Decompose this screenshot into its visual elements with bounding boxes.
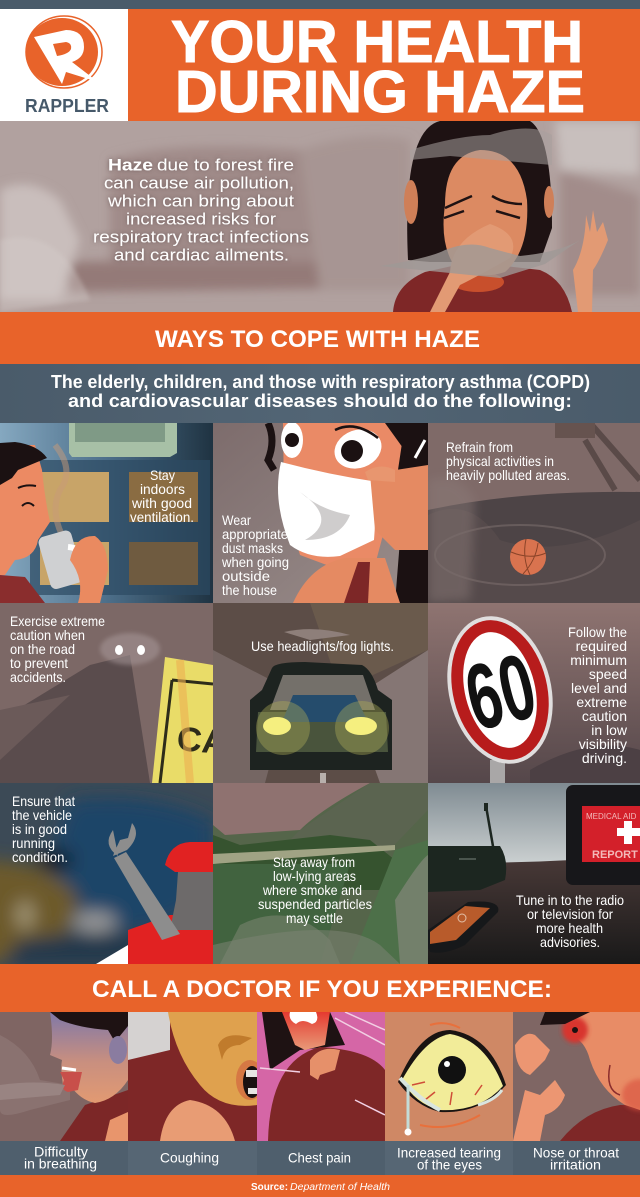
logo: Rappler: RAPPLER	[25, 96, 109, 116]
panel: wear dust masks: when going	[221, 554, 289, 570]
panel: refrain from physical activity: Refrain from	[446, 439, 513, 455]
panel: speed limit	[428, 603, 640, 783]
panel: use headlights: Use headlights/fog lights.	[251, 638, 394, 654]
panel: caution on the road	[0, 603, 228, 783]
label strip: symptoms: Chest pain	[288, 1150, 351, 1166]
panel: refrain from physical activity: heavily polluted areas.	[446, 467, 570, 483]
panel: caution on the road: Exercise extreme	[10, 613, 105, 629]
logo: Rappler	[0, 9, 128, 121]
panel: speed limit: driving.	[582, 750, 627, 766]
panel: radio and television: Tune in to the radio	[516, 892, 624, 908]
title	[171, 9, 585, 125]
text block: hero intro: which can bring about	[107, 192, 294, 210]
panel: speed limit: caution	[582, 708, 627, 724]
panel: teary eyes	[385, 1012, 513, 1141]
panel: caution on the road: to prevent	[10, 655, 68, 671]
panel: vehicle condition: condition.	[12, 849, 68, 865]
heading: ways to cope: WAYS TO COPE WITH HAZE	[155, 326, 480, 353]
panel: stay indoors: ventilation.	[130, 509, 194, 525]
panel: speed limit: extreme	[576, 694, 627, 710]
text block: hero intro: respiratory tract infections	[93, 228, 309, 246]
figure: coughing woman	[380, 121, 608, 312]
panel: speed limit: Follow the	[568, 624, 627, 640]
panel: stay indoors: indoors	[140, 481, 185, 497]
panel: stay indoors: Stay	[150, 467, 175, 483]
panel: radio and television	[428, 783, 640, 964]
panel: speed limit: visibility	[579, 736, 627, 752]
panel: vehicle condition	[0, 783, 213, 964]
label strip: symptoms: Nose or throat	[533, 1144, 619, 1160]
panel: stay indoors	[0, 423, 213, 603]
panel: speed limit: in low	[591, 722, 628, 738]
panel: wear dust masks: Wear	[222, 512, 251, 528]
panel: coughing	[128, 1012, 257, 1141]
panel: speed limit: minimum	[570, 652, 627, 668]
icon: toolbox and wrench	[96, 823, 213, 964]
panel: vehicle condition: the vehicle	[12, 807, 72, 823]
heading: call a doctor: CALL A DOCTOR IF YOU EXPERIENCE:	[92, 976, 552, 1003]
panel: speed limit: speed	[589, 666, 627, 682]
panel: radio and television: more health	[536, 920, 603, 936]
heading: ways to cope	[0, 312, 640, 364]
panel: refrain from physical activity	[428, 423, 640, 603]
panel: wear dust masks: dust masks	[222, 540, 283, 556]
icon: 60 sign	[432, 605, 568, 775]
text block: hero intro	[93, 156, 309, 264]
panel: use headlights	[213, 603, 428, 783]
subheading: who should act	[0, 364, 640, 423]
label strip: symptoms: Increased tearing	[397, 1144, 501, 1160]
panel: wear dust masks: the house	[222, 582, 277, 598]
subheading: who should act: and cardiovascular diseases should do the following:	[68, 391, 572, 411]
panel: vehicle condition: Ensure that	[12, 793, 75, 809]
panel: low-lying areas: low-lying areas	[273, 868, 356, 884]
footer: source: Department of Health	[290, 1182, 390, 1193]
text block: hero intro: Haze	[108, 156, 153, 174]
panel: nose or throat irritation	[513, 1012, 640, 1141]
panel: hero illustration	[0, 121, 640, 312]
label strip: symptoms: Difficulty	[34, 1144, 88, 1160]
icon: television medical report: MEDICAL AID	[586, 812, 637, 821]
panel: speed limit: required	[576, 638, 627, 654]
icon: caution sign	[152, 657, 228, 783]
panel: low-lying areas	[213, 783, 428, 964]
footer: source	[0, 1175, 640, 1197]
panel: low-lying areas: where smoke and	[262, 882, 362, 898]
panel: stay indoors: with good	[131, 495, 192, 511]
text block: hero intro: can cause air pollution,	[104, 174, 294, 192]
panel: caution on the road: accidents.	[10, 669, 66, 685]
panel: chest pain	[257, 1012, 385, 1141]
icon: caution sign: CA	[175, 720, 228, 762]
top bar	[0, 0, 640, 9]
panel: wear dust masks	[213, 422, 428, 603]
label strip: symptoms: in breathing	[24, 1156, 97, 1172]
icon: smoke overlay	[0, 238, 90, 312]
panel: vehicle condition: running	[12, 835, 55, 851]
label strip: symptoms: of the eyes	[417, 1156, 482, 1172]
panel: vehicle condition: is in good	[12, 821, 67, 837]
icon: basketball	[510, 539, 546, 575]
title: YOUR HEALTH	[171, 9, 583, 75]
panel: difficulty in breathing	[0, 1012, 128, 1141]
panel: low-lying areas: may settle	[286, 910, 343, 926]
panel: caution on the road: caution when	[10, 627, 85, 643]
panel: radio and television: advisories.	[540, 934, 600, 950]
icon: smartphone	[428, 901, 498, 953]
panel: radio and television: or television for	[527, 906, 613, 922]
icon: car	[250, 662, 392, 770]
label strip: symptoms: irritation	[550, 1156, 601, 1172]
icon: 60 sign: 60	[455, 633, 545, 751]
heading: call a doctor	[0, 964, 640, 1012]
panel: caution on the road: on the road	[10, 641, 75, 657]
label strip: symptoms	[0, 1141, 640, 1175]
label strip: symptoms: Coughing	[160, 1150, 219, 1166]
panel: wear dust masks: appropriate	[222, 526, 288, 542]
text block: hero intro: increased risks for	[126, 210, 276, 228]
panel: low-lying areas: suspended particles	[258, 896, 372, 912]
icon: radio	[428, 803, 506, 892]
icon: television medical report: REPORT	[592, 849, 638, 861]
panel: speed limit: level and	[571, 680, 627, 696]
title: DURING HAZE	[175, 59, 585, 125]
footer: source: Source:	[251, 1182, 288, 1193]
text block: hero intro: and cardiac ailments.	[114, 246, 289, 264]
text block: hero intro: due to forest fire	[157, 156, 294, 174]
header band	[0, 9, 640, 125]
panel: low-lying areas: Stay away from	[273, 854, 355, 870]
panel: wear dust masks: outside	[222, 568, 270, 584]
icon: television medical report	[566, 785, 640, 885]
panel: refrain from physical activity: physical activities in	[446, 453, 554, 469]
subheading: who should act: The elderly, children, and those with respiratory asthma (COPD)	[51, 372, 590, 392]
